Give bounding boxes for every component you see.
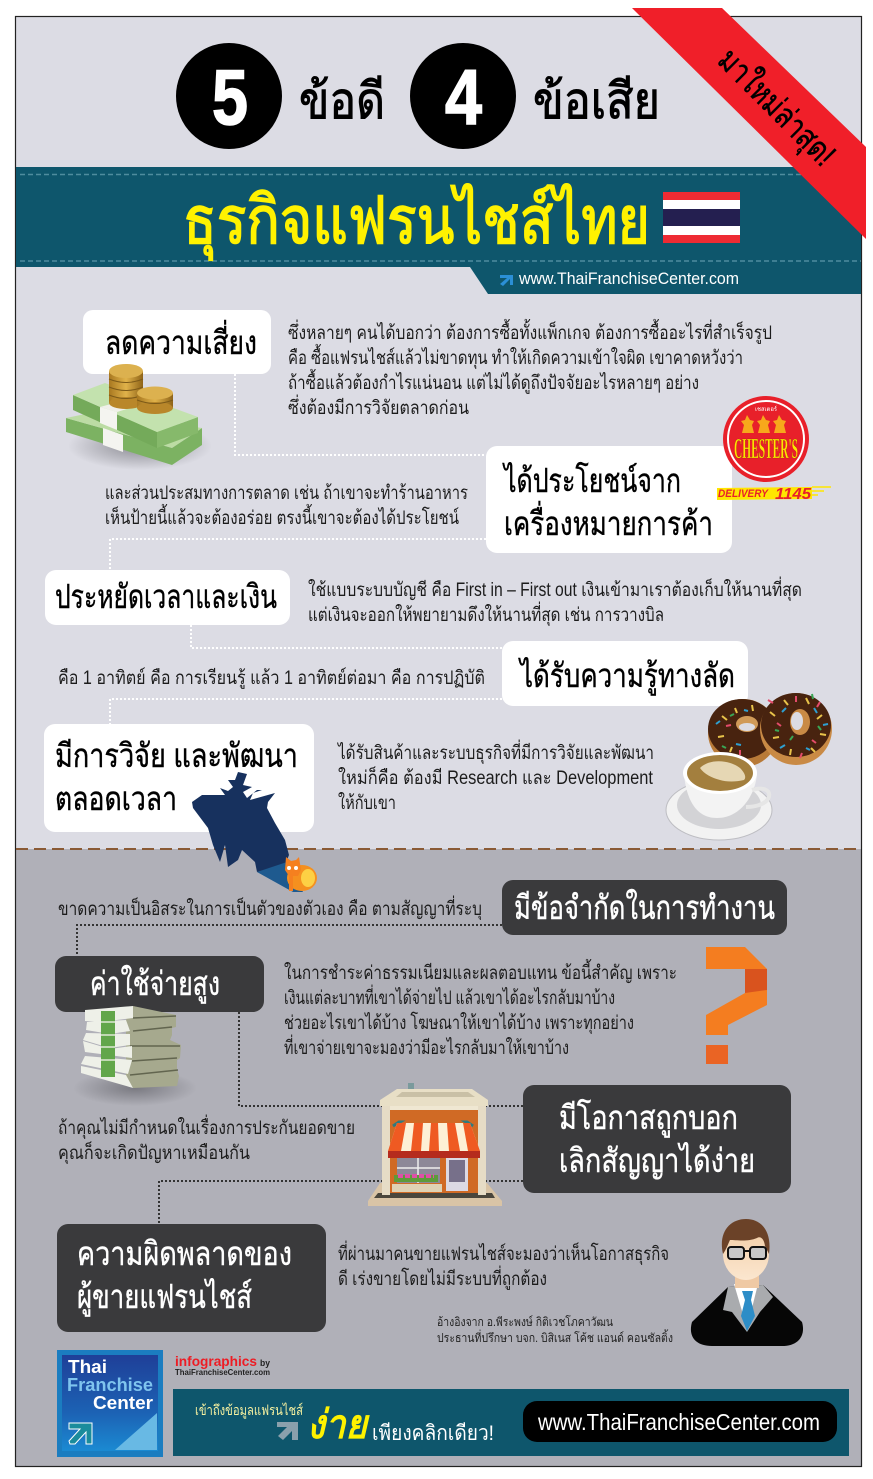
panel: research and development: ตลอดเวลา [55, 780, 177, 817]
number badge 4 [410, 43, 516, 149]
text: trademark benefit: เห็นป้ายนี้แล้วจะต้องอร่อย ตรงนี้เขาจะต้องได้ประโยชน์ [105, 504, 459, 529]
number badge 4: 4 [445, 53, 482, 141]
text: reduce risk [288, 319, 772, 419]
text: contract termination: ถ้าคุณไม่มีกำหนดในเรื่องการประกันยอดขาย [58, 1114, 355, 1140]
credit: infographics by: ThaiFranchiseCenter.com [175, 1368, 270, 1377]
panel: contract termination: เลิกสัญญาได้ง่าย [559, 1142, 755, 1179]
text: research and development [336, 739, 654, 814]
text: seller mistakes: ดี เร่งขายโดยไม่มีระบบที่ถูกต้อง [338, 1265, 547, 1290]
text: save time and money [308, 576, 802, 627]
panel: trademark benefit: เครื่องหมายการค้า [504, 501, 713, 542]
panel: reduce risk: ลดความเสี่ยง [105, 320, 257, 361]
panel: contract termination: มีโอกาสถูกบอก [559, 1099, 738, 1138]
ribbon: new [632, 8, 866, 239]
text: contract termination [58, 1114, 355, 1165]
credit: infographics by: infographics [175, 1353, 257, 1369]
website pill [523, 1401, 837, 1442]
panel: high cost: ค่าใช้จ่ายสูง [90, 965, 220, 1004]
panel: work limits: มีข้อจำกัดในการทำงาน [514, 889, 775, 926]
panel: save time and money [45, 570, 290, 625]
number badge 5 [176, 43, 282, 149]
icon: Chester's logo: เชสเตอร์ [755, 405, 778, 413]
text: high cost [284, 959, 677, 1059]
credit: infographics by: by [260, 1358, 270, 1368]
logo: Thai Franchise Center: Center [93, 1393, 153, 1413]
text: high cost: ในการชำระค่าธรรมเนียมและผลตอบแทน ข้อนี้สำคัญ เพราะ [284, 959, 677, 984]
text: seller mistakes [338, 1240, 669, 1290]
text: reduce risk: คือ ซื้อแฟรนไชส์แล้วไม่ขาดทุน ทำให้เกิดความเข้าใจผิด เขาคาดหวังว่า [288, 344, 743, 370]
text: reference: ประธานที่ปรึกษา บจก. บิสิเนส โค้ช แอนด์ คอนซัลติ้ง [437, 1329, 673, 1345]
logo: Thai Franchise Center: Franchise [67, 1375, 153, 1395]
banner: call to action: เข้าถึงข้อมูลแฟรนไชส์ [195, 1402, 303, 1419]
text: research and development: ให้กับเขา [338, 792, 396, 814]
panel: reduce risk [83, 310, 271, 374]
panel: contract termination [523, 1085, 791, 1193]
panel: seller mistakes: ผู้ขายแฟรนไชส์ [77, 1278, 252, 1317]
title: 5 pros 4 cons: ข้อดี [299, 73, 385, 129]
icon: Chester's logo [717, 396, 831, 503]
text: work limits: ขาดความเป็นอิสระในการเป็นตัวของตัวเอง คือ ตามสัญญาที่ระบุ [58, 895, 482, 921]
website pill: www.ThaiFranchiseCenter.com [537, 1409, 820, 1435]
text: high cost: เงินแต่ละบาทที่เขาได้จ่ายไป แล้วเขาได้อะไรกลับมาบ้าง [284, 984, 615, 1009]
text: contract termination: คุณก็จะเกิดปัญหาเหมือนกัน [58, 1140, 250, 1165]
connector lines, upper [110, 374, 502, 724]
title: 5 pros 4 cons [176, 43, 660, 149]
panel: trademark benefit [486, 446, 732, 553]
logo: Thai Franchise Center [57, 1350, 163, 1457]
icon: cash stack [73, 1006, 197, 1106]
title: 5 pros 4 cons: ข้อเสีย [533, 73, 660, 129]
icon: question mark [706, 947, 767, 1064]
banner: call to action: เพียงคลิกเดียว! [372, 1422, 494, 1445]
banner: call to action: ง่าย [307, 1403, 370, 1447]
icon: money and coins [66, 364, 212, 470]
connector lines, lower [77, 925, 523, 1224]
credit: infographics by [175, 1353, 270, 1377]
panel: seller mistakes: ความผิดพลาดของ [77, 1235, 292, 1272]
panel: research and development [44, 724, 314, 832]
number badge 5: 5 [212, 53, 248, 141]
text: reference [437, 1315, 673, 1345]
panel: trademark benefit: ได้ประโยชน์จาก [502, 462, 681, 499]
banner: call to action [173, 1389, 849, 1456]
text: save time and money: แต่เงินจะออกให้พยายามดึงให้นานที่สุด เช่น การวางบิล [308, 601, 664, 627]
text: trademark benefit [105, 483, 468, 529]
panel: shortcut knowledge: ได้รับความรู้ทางลัด [518, 657, 735, 696]
main heading: ธุรกิจแฟรนไชส์ไทย [183, 183, 650, 261]
text: high cost: ที่เขาจ่ายเขาจะมองว่ามีอะไรกลับมาให้เขาบ้าง [284, 1034, 569, 1059]
text: reduce risk: ซึ่งหลายๆ คนได้บอกว่า ต้องการซื้อทั้งแพ็กเกจ ต้องการซื้ออะไรที่สำเร็จรูป [288, 319, 772, 344]
panel: seller mistakes [57, 1224, 326, 1332]
icon: shop [368, 1083, 502, 1206]
text: trademark benefit: และส่วนประสมทางการตลาด เช่น ถ้าเขาจะทำร้านอาหาร [105, 483, 468, 504]
text: reduce risk: ถ้าซื้อแล้วต้องกำไรแน่นอน แต่ไม่ได้ดูถึงปัจจัยอะไรหลายๆ อย่าง [288, 369, 699, 394]
icon: donuts and coffee [666, 693, 832, 840]
text: research and development: ได้รับสินค้าและระบบธุรกิจที่มีการวิจัยและพัฒนา [336, 739, 654, 765]
icon: Chester's logo: DELIVERY [718, 488, 770, 500]
icon: Thai flag [663, 192, 740, 243]
panel: research and development: มีการวิจัย และพัฒนา [55, 737, 298, 774]
icon: businessman [691, 1219, 803, 1346]
text: seller mistakes: ที่ผ่านมาคนขายแฟรนไชส์จะมองว่าเห็นโอกาสธุรกิจ [338, 1240, 669, 1266]
ribbon: new: มาใหม่ล่าสุด! [710, 41, 843, 174]
icon: cat with big shadow [192, 772, 317, 892]
panel: work limits [502, 880, 787, 935]
icon: Chester's logo: 1145 [775, 486, 812, 503]
teal title band [16, 167, 861, 294]
logo: Thai Franchise Center: Thai [68, 1357, 107, 1377]
website link: www.ThaiFranchiseCenter.com [518, 269, 739, 288]
panel: save time and money: ประหยัดเวลาและเงิน [55, 578, 277, 615]
orange cat [285, 857, 317, 891]
text: reduce risk: ซึ่งต้องมีการวิจัยตลาดก่อน [288, 394, 469, 419]
text: high cost: ช่วยอะไรเขาได้บ้าง โฆษณาให้เขาได้บ้าง เพราะทุกอย่าง [284, 1011, 634, 1035]
text: reference: อ้างอิงจาก อ.พีระพงษ์ กิติเวชโภคาวัฒน [437, 1315, 613, 1329]
panel: shortcut knowledge [502, 641, 748, 706]
text: research and development: ใหม่ก็คือ ต้องมี Research และ Development [338, 765, 654, 789]
text: shortcut knowledge: คือ 1 อาทิตย์ คือ การเรียนรู้ แล้ว 1 อาทิตย์ต่อมา คือ การปฏิบัติ [58, 667, 485, 689]
panel: high cost [55, 956, 264, 1012]
